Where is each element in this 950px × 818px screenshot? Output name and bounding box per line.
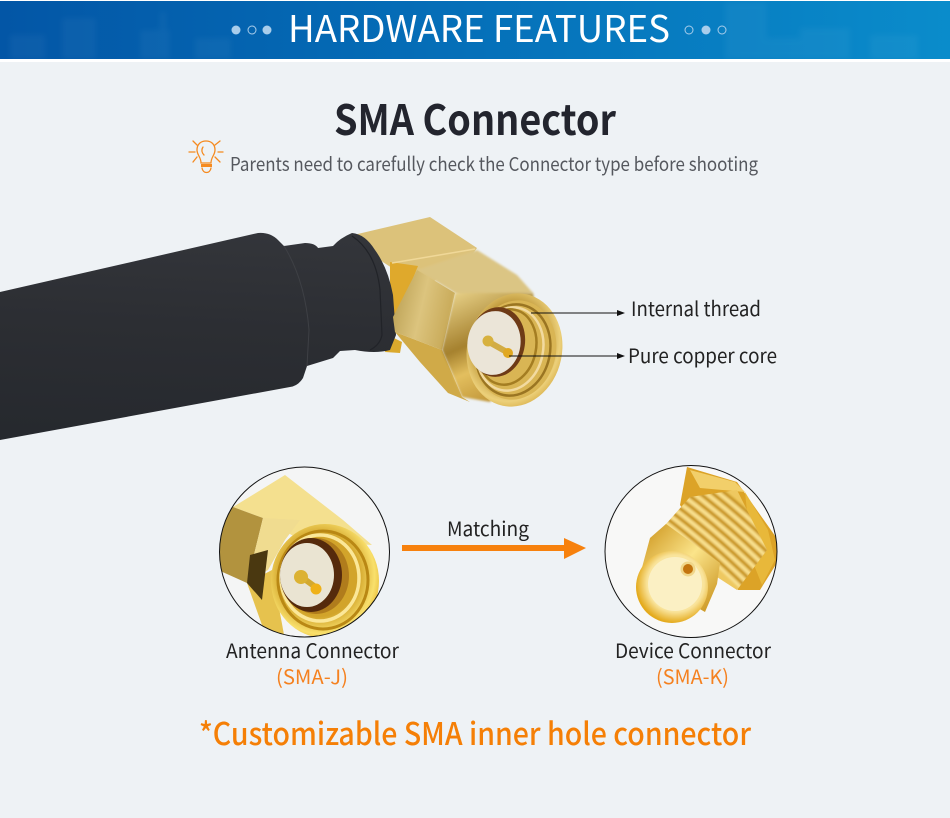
- dark inner gap: [464, 303, 530, 381]
- label: antenna connector: Antenna Connector: [226, 635, 399, 664]
- connector threads: [467, 297, 559, 403]
- arrow: matching: [402, 538, 586, 559]
- center pin: [482, 336, 513, 358]
- hex nut front facet: [442, 293, 540, 402]
- white insulator: [463, 308, 525, 378]
- collar: [640, 524, 720, 612]
- header banner: [0, 0, 950, 62]
- hex nut lower facet: [395, 332, 470, 402]
- header dots right: [685, 26, 726, 34]
- gold elbow: [345, 217, 477, 290]
- threads: [664, 490, 767, 590]
- footer note: *Customizable SMA inner hole connector: [199, 709, 751, 754]
- label: SMA-J: (SMA-J): [276, 661, 348, 690]
- arrow: internal thread: [531, 310, 625, 316]
- subtitle: Parents need to carefully check the Connector type before shooting: [230, 150, 758, 177]
- hex nut left facet: [393, 270, 455, 350]
- label: SMA-K: (SMA-K): [656, 661, 729, 690]
- socket hole: [680, 562, 696, 576]
- cup: [636, 551, 708, 623]
- flange: [680, 467, 785, 590]
- circle photo: device connector: [605, 455, 787, 638]
- hex nut top facet: [417, 250, 533, 300]
- heading: SMA Connector: SMA Connector: [334, 87, 617, 148]
- label: device connector: Device Connector: [615, 635, 771, 664]
- arrow: pure copper core: [509, 353, 625, 359]
- main photo: antenna cable and SMA connector: [0, 217, 573, 440]
- header dots left: [232, 26, 272, 34]
- connector outer ring: [456, 284, 573, 416]
- label: internal thread: Internal thread: [631, 293, 761, 322]
- circle photo: antenna connector: [215, 467, 390, 640]
- black cable: [0, 233, 396, 440]
- label: pure copper core: Pure copper core: [628, 340, 777, 369]
- icon: light bulb: [189, 141, 223, 172]
- matching label: Matching: [447, 513, 529, 542]
- header title: HARDWARE FEATURES: [288, 0, 670, 53]
